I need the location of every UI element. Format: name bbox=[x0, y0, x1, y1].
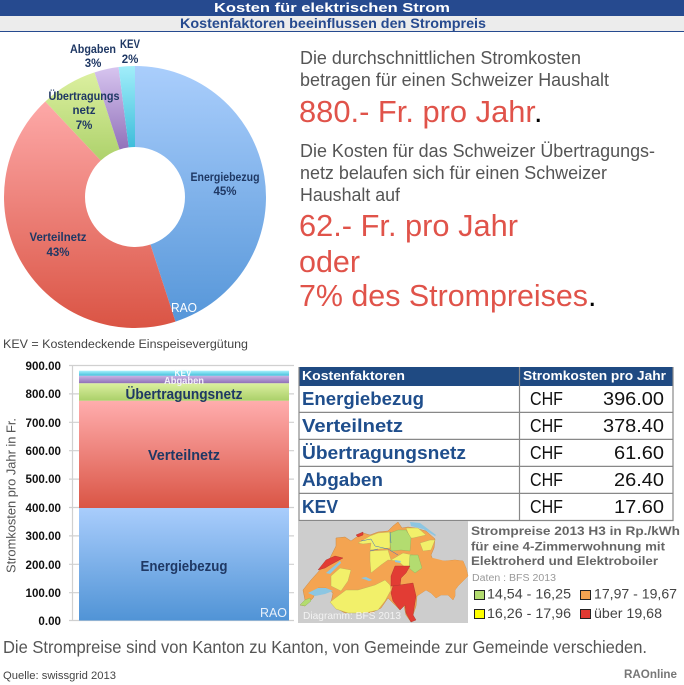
table currency and values: CHF bbox=[530, 416, 563, 436]
stacked bar chart bbox=[4, 360, 294, 628]
table row names: Verteilnetz bbox=[302, 415, 403, 436]
legend title: Strompreise 2013 H3 in Rp./kWh bbox=[471, 524, 680, 538]
table currency and values: 26.40 bbox=[614, 470, 664, 490]
map base: orange cantons bbox=[300, 522, 468, 622]
intro text bbox=[300, 48, 609, 90]
intro text: Die durchschnittlichen Stromkosten bbox=[300, 48, 581, 68]
transmission text: netz belaufen sich für einen Schweizer bbox=[300, 163, 607, 183]
y axis labels: 100.00 bbox=[26, 587, 61, 600]
table header bbox=[302, 368, 666, 383]
stacked bar chart: RAO bbox=[260, 606, 287, 620]
y axis labels bbox=[26, 360, 61, 628]
legend title bbox=[471, 524, 680, 568]
table currency and values: 396.00 bbox=[603, 389, 664, 409]
transmission text: Haushalt auf bbox=[300, 185, 401, 205]
title bar: Kosten für elektrischen Strom bbox=[214, 1, 450, 15]
bar labels bbox=[126, 368, 242, 575]
table header: Kostenfaktoren bbox=[302, 368, 405, 383]
subtitle bar bbox=[0, 16, 684, 32]
closing statement: Die Strompreise sind von Kanton zu Kanton, von Gemeinde zur Gemeinde verschieden. bbox=[3, 637, 647, 657]
KEV note: KEV = Kostendeckende Einspeisevergütung bbox=[3, 337, 248, 351]
donut chart: cost shares: RAO bbox=[171, 300, 197, 315]
y axis labels: 800.00 bbox=[26, 388, 61, 401]
y axis labels: 900.00 bbox=[26, 360, 61, 373]
map legend: Daten : BFS 2013 bbox=[472, 573, 556, 584]
donut chart: cost shares: 45% bbox=[213, 186, 237, 198]
table currency and values: CHF bbox=[530, 497, 563, 517]
y axis labels: 400.00 bbox=[26, 502, 61, 515]
donut chart: cost shares: netz bbox=[72, 105, 96, 117]
legend ranges: 14,54 - 16,25 bbox=[487, 586, 571, 602]
donut chart: cost shares: Verteilnetz bbox=[30, 232, 87, 244]
transmission text bbox=[300, 141, 655, 205]
donut chart: cost shares: KEV bbox=[120, 39, 140, 51]
table currency and values: CHF bbox=[530, 470, 563, 490]
table currency and values: CHF bbox=[530, 389, 563, 409]
legend ranges bbox=[487, 586, 677, 621]
y axis labels: 300.00 bbox=[26, 530, 61, 543]
bar labels: Abgaben bbox=[164, 376, 204, 387]
legend ranges: 17,97 - 19,67 bbox=[594, 586, 677, 602]
donut chart: cost shares bbox=[4, 39, 266, 328]
donut chart: cost shares: 43% bbox=[46, 247, 70, 259]
bar labels: KEV bbox=[174, 368, 192, 378]
donut chart: cost shares: 2% bbox=[122, 54, 138, 66]
highlight: transmission cost: oder bbox=[299, 245, 360, 279]
publisher: RAOnline bbox=[624, 669, 677, 681]
map of Switzerland: Diagramm: BFS 2013 bbox=[303, 610, 401, 622]
donut chart: cost shares: Übertragungs bbox=[48, 90, 120, 103]
legend title: Elektroherd und Elektroboiler bbox=[471, 554, 658, 568]
source: Quelle: swissgrid 2013 bbox=[3, 670, 116, 682]
y axis labels: 600.00 bbox=[26, 445, 61, 458]
donut chart: cost shares: Abgaben bbox=[70, 44, 116, 56]
cost table bbox=[299, 367, 673, 520]
intro text: betragen für einen Schweizer Haushalt bbox=[300, 70, 609, 90]
legend swatches bbox=[474, 590, 590, 618]
title bar bbox=[0, 0, 684, 16]
table row names: Energiebezug bbox=[302, 388, 424, 409]
bar labels: Verteilnetz bbox=[148, 447, 220, 464]
table row names bbox=[302, 388, 466, 517]
donut chart: cost shares: Energiebezug bbox=[190, 172, 260, 184]
table currency and values bbox=[530, 389, 664, 517]
transmission text: Die Kosten für das Schweizer Übertragungs- bbox=[300, 141, 655, 161]
table currency and values: 61.60 bbox=[614, 443, 664, 463]
table header: Stromkosten pro Jahr bbox=[523, 368, 666, 383]
bar labels: Energiebezug bbox=[140, 558, 228, 575]
bar segments bbox=[79, 371, 289, 620]
subtitle bar: Kostenfaktoren beeinflussen den Strompreis bbox=[180, 16, 486, 31]
map: eastern canton bbox=[405, 558, 468, 600]
y axis labels: 200.00 bbox=[26, 559, 61, 572]
table currency and values: 378.40 bbox=[603, 416, 664, 436]
donut chart: cost shares: 3% bbox=[85, 58, 101, 70]
legend ranges: über 19,68 bbox=[594, 605, 662, 621]
highlight: transmission cost: 62.- Fr. pro Jahr bbox=[299, 209, 518, 243]
table currency and values: 17.60 bbox=[614, 497, 664, 517]
table row names: KEV bbox=[302, 496, 339, 517]
legend title: für eine 4-Zimmerwohnung mit bbox=[471, 540, 665, 554]
y axis labels: 700.00 bbox=[26, 417, 61, 430]
map of Switzerland bbox=[298, 521, 468, 623]
legend ranges: 16,26 - 17,96 bbox=[487, 605, 571, 621]
y axis labels: 500.00 bbox=[26, 473, 61, 486]
highlight: transmission cost: 7% des Strompreises. bbox=[299, 279, 596, 313]
table currency and values: CHF bbox=[530, 443, 563, 463]
highlight: transmission cost bbox=[299, 209, 596, 313]
y axis labels: 0.00 bbox=[38, 615, 61, 628]
donut chart: cost shares: 7% bbox=[76, 120, 92, 132]
highlight: annual cost: 880.- Fr. pro Jahr. bbox=[299, 95, 542, 129]
bar labels: Übertragungsnetz bbox=[126, 386, 242, 403]
table row names: Übertragungsnetz bbox=[302, 442, 466, 463]
map legend bbox=[471, 524, 680, 621]
y axis title: Stromkosten pro Jahr in Fr. bbox=[4, 418, 18, 573]
table row names: Abgaben bbox=[302, 469, 383, 490]
